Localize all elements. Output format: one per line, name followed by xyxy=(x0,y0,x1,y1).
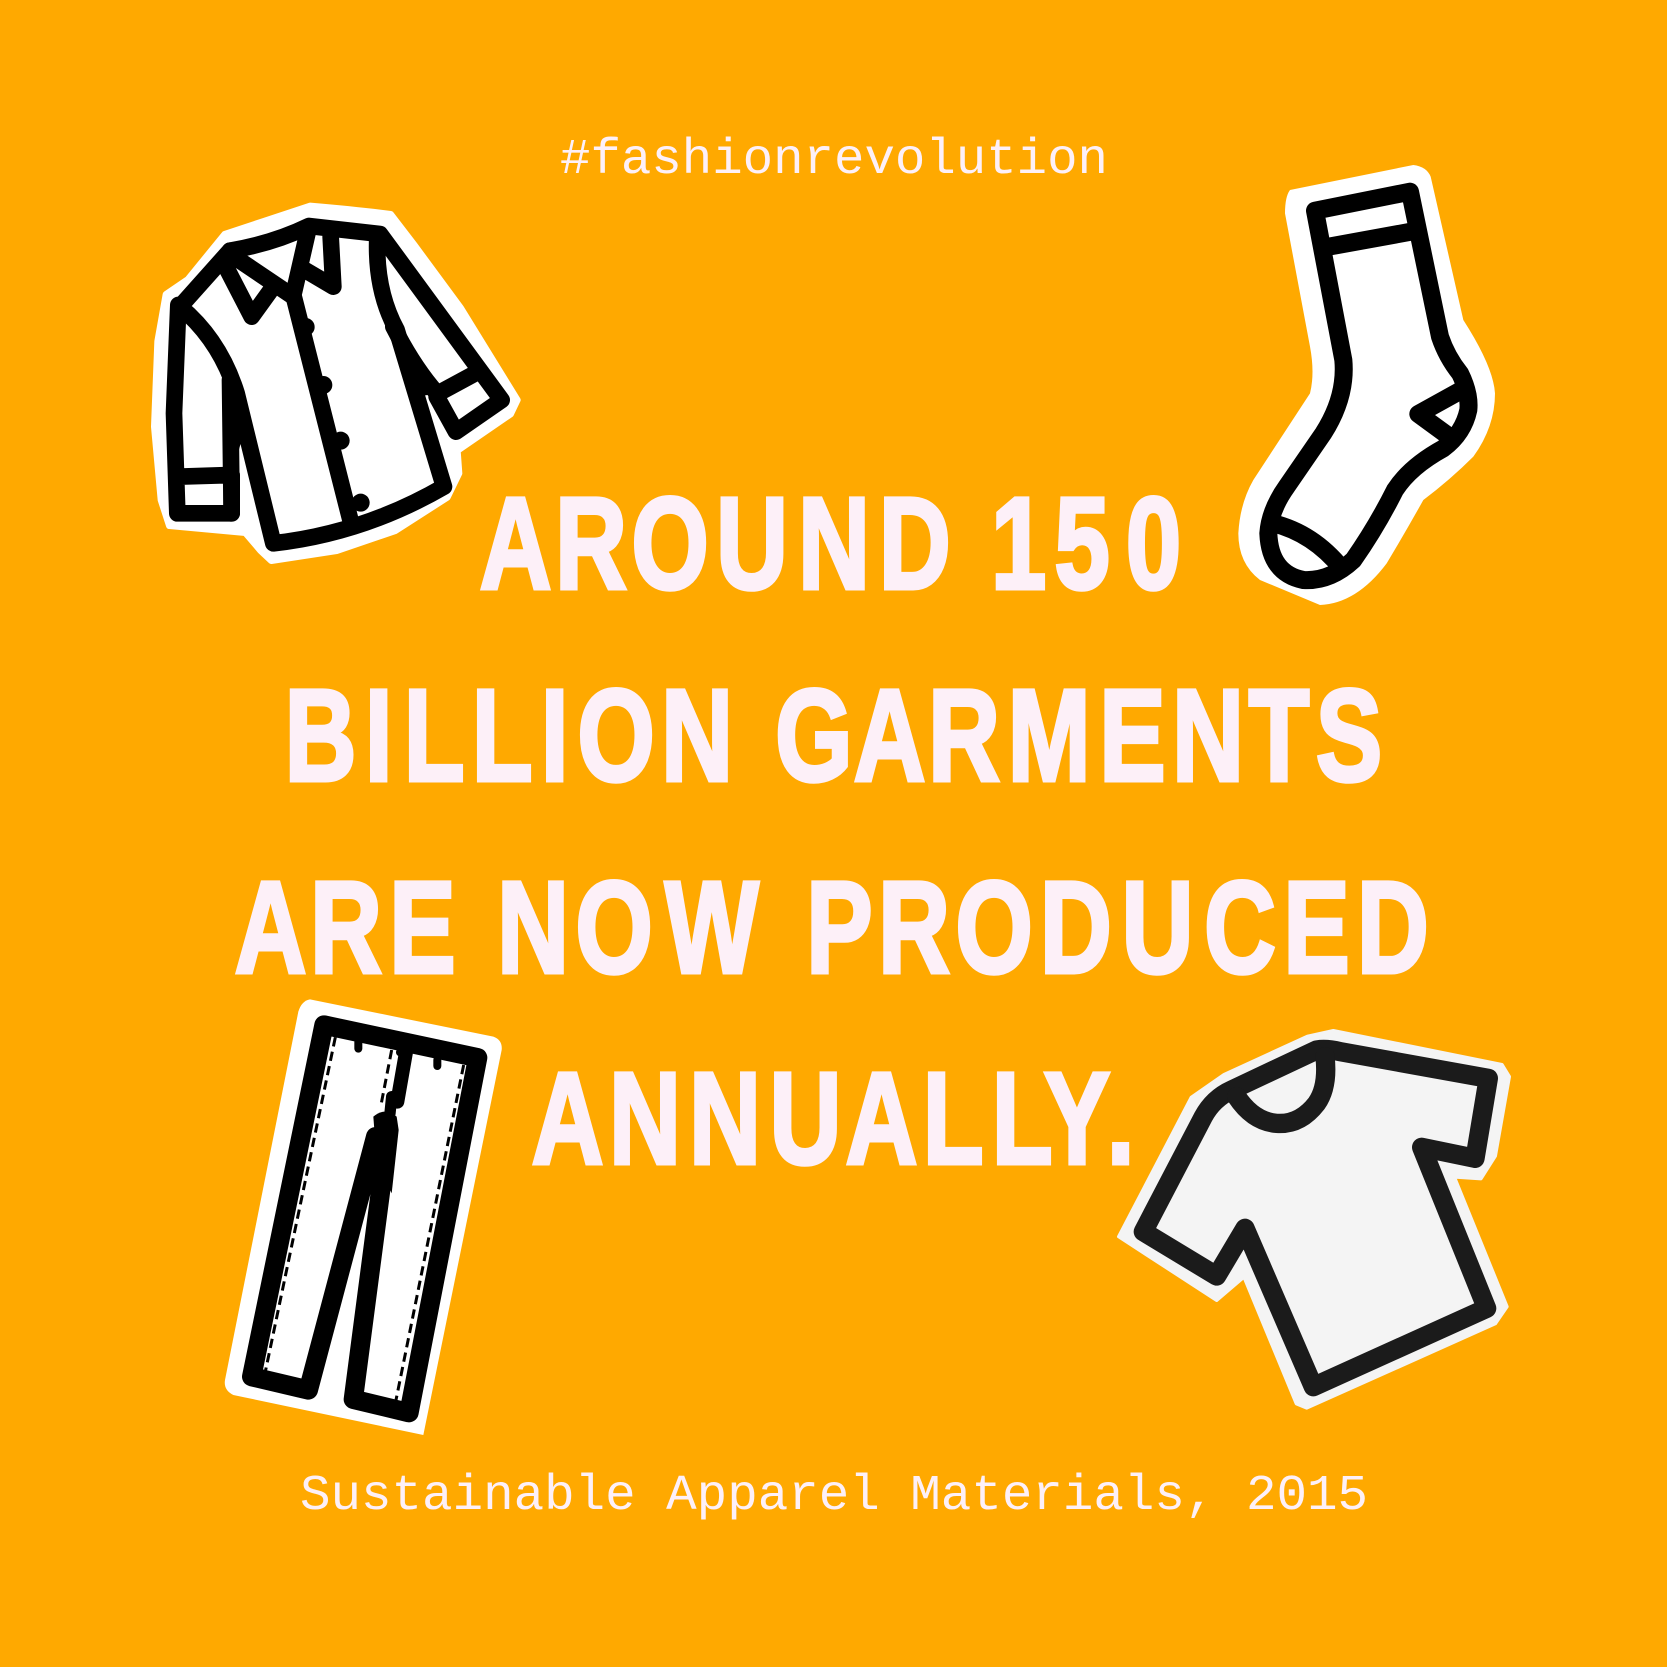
main statement: BILLION GARMENTS xyxy=(285,662,1382,809)
icon: t-shirt sticker xyxy=(1119,1031,1509,1408)
source credit: Sustainable Apparel Materials, 2015 xyxy=(300,1468,1368,1525)
icon: trousers sticker xyxy=(225,999,502,1435)
main statement: AROUND 150 xyxy=(480,470,1181,617)
main statement: ANNUALLY. xyxy=(532,1045,1135,1192)
main statement xyxy=(235,470,1429,1192)
main statement: ARE NOW PRODUCED xyxy=(235,854,1429,1001)
icon: shirt sticker xyxy=(154,206,517,561)
hashtag heading: #fashionrevolution xyxy=(560,132,1108,189)
icon: sock sticker xyxy=(1238,165,1495,605)
